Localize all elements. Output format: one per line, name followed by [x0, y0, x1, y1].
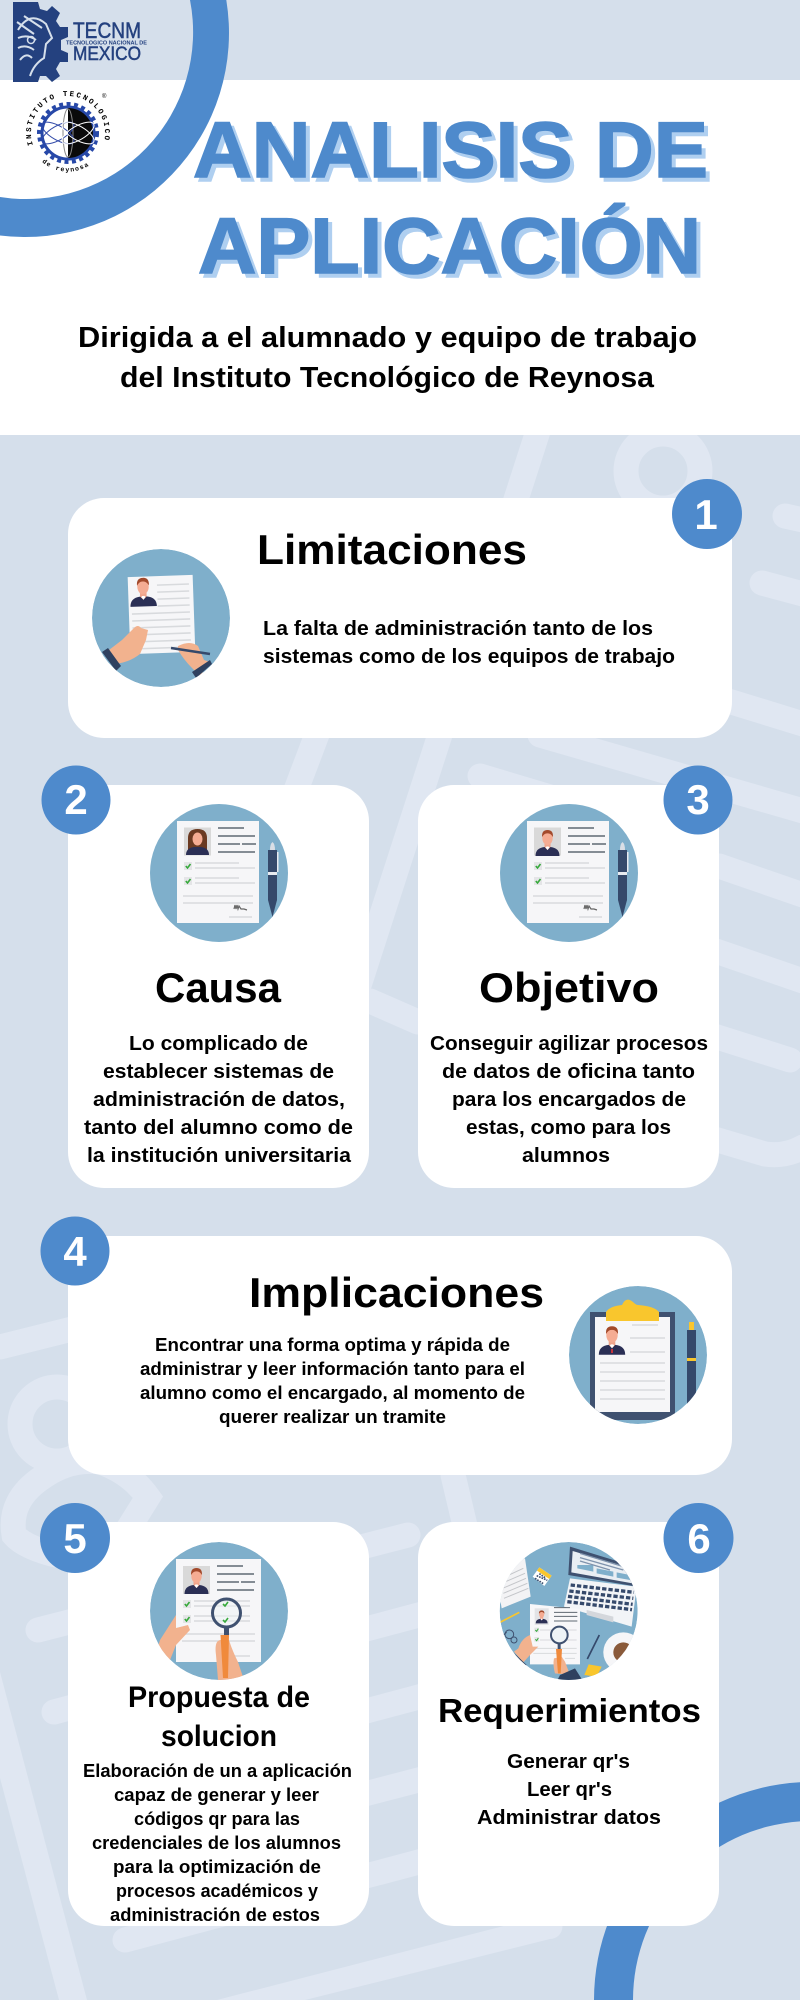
number badge 4: 4: [63, 1228, 87, 1275]
text block: [83, 1760, 352, 1925]
panel: Limitaciones: [68, 479, 742, 738]
text block: [84, 1032, 353, 1167]
card background: [68, 498, 732, 738]
title: ANALISIS DE: [197, 109, 712, 198]
heading: Requerimientos: [438, 1692, 701, 1729]
number badge 3: 3: [686, 776, 710, 823]
text block: establecer sistemas de: [103, 1060, 334, 1083]
text block: para la optimización de: [113, 1856, 321, 1877]
text block: para los encargados de: [452, 1088, 686, 1111]
text block: La falta de administración tanto de los: [263, 617, 653, 640]
title: APLICACIÓN: [202, 205, 705, 294]
text block: credenciales de los alumnos: [92, 1832, 341, 1853]
heading: [128, 1681, 310, 1753]
number badge 5: 5: [63, 1515, 87, 1562]
text block: de datos de oficina tanto: [442, 1060, 695, 1083]
text block: Elaboración de un a aplicación: [83, 1760, 352, 1781]
card background: [68, 1236, 732, 1475]
logo: Instituto Tecnologico de Reynosa: ®: [102, 93, 107, 100]
text block: administración de estos: [110, 1904, 320, 1925]
text block: sistemas como de los equipos de trabajo: [263, 645, 675, 668]
number badge 4: [40, 1216, 110, 1286]
subtitle: [78, 322, 697, 394]
card background: [68, 1522, 369, 1926]
heading: solucion: [161, 1720, 277, 1753]
number badge 1: 1: [694, 491, 718, 538]
title: APLICACIÓN: [198, 201, 701, 290]
text block: Encontrar una forma optima y rápida de: [155, 1334, 510, 1355]
panel: Objetivo: [418, 766, 732, 1188]
heading: Implicaciones: [249, 1269, 544, 1316]
panel: Implicaciones: [40, 1216, 732, 1475]
text block: Generar qr's: [507, 1750, 630, 1773]
text block: querer realizar un tramite: [219, 1406, 446, 1427]
text block: [477, 1750, 661, 1829]
logo: Instituto Tecnologico de Reynosa: de reynosa: [42, 160, 89, 173]
subtitle: del Instituto Tecnológico de Reynosa: [120, 362, 655, 394]
heading: Causa: [155, 964, 282, 1011]
logo: TECNM: TECNM: [73, 18, 141, 43]
panel: Requerimientos: [418, 1503, 734, 1926]
text block: alumno como el encargado, al momento de: [140, 1382, 525, 1403]
text block: Conseguir agilizar procesos: [430, 1032, 708, 1055]
number badge 2: 2: [64, 776, 88, 823]
white header band: [0, 80, 800, 435]
number badge 3: [664, 766, 732, 834]
number badge 6: 6: [687, 1515, 711, 1562]
title: ANALISIS DE: [193, 105, 708, 194]
background pattern: [0, 425, 800, 2000]
logo: TECNM: MEXICO: [73, 44, 141, 65]
text block: procesos académicos y: [116, 1880, 319, 1901]
text block: estas, como para los: [466, 1116, 671, 1139]
number badge 1: [672, 479, 742, 549]
text block: [430, 1032, 708, 1167]
logo: Instituto Tecnologico de Reynosa: [26, 91, 110, 173]
text block: Lo complicado de: [129, 1032, 308, 1055]
text block: códigos qr para las: [134, 1808, 300, 1829]
subtitle: Dirigida a el alumnado y equipo de trabajo: [78, 322, 697, 354]
heading: Objetivo: [479, 964, 659, 1011]
icon: resume with man: [500, 804, 638, 942]
title: [193, 105, 712, 294]
number badge 6: [664, 1503, 734, 1573]
number badge 2: [42, 766, 110, 834]
blue arc bottom right: [594, 1782, 800, 2000]
logo: TECNM: [13, 2, 147, 82]
card background: [418, 785, 719, 1188]
card background: [418, 1522, 719, 1926]
heading: Propuesta de: [128, 1681, 310, 1714]
icon: magnifier over resume: [150, 1542, 288, 1680]
card background: [68, 785, 369, 1188]
heading: Limitaciones: [257, 526, 527, 573]
panel: Propuesta de solucion: [40, 1503, 369, 1926]
text block: alumnos: [522, 1144, 610, 1167]
icon: clipboard with resume: [569, 1286, 707, 1424]
icon: hands signing resume: [92, 549, 230, 687]
text block: capaz de generar y leer: [114, 1784, 319, 1805]
number badge 5: [40, 1503, 110, 1573]
icon: resume with woman: [150, 804, 288, 942]
text block: tanto del alumno como de: [84, 1116, 353, 1139]
text block: la institución universitaria: [87, 1144, 352, 1167]
text block: administración de datos,: [93, 1088, 345, 1111]
icon: desk with laptop and resume: [495, 1542, 643, 1682]
panel: Causa: [42, 766, 369, 1188]
text block: [263, 617, 675, 668]
blue arc top left: [0, 0, 229, 237]
text block: Leer qr's: [527, 1778, 612, 1801]
logo: Instituto Tecnologico de Reynosa: INSTITUTO TECNOLOGICO: [26, 91, 110, 146]
logo: TECNM: TECNOLOGICO NACIONAL DE: [66, 40, 147, 46]
text block: administrar y leer información tanto para el: [140, 1358, 525, 1379]
text block: [140, 1334, 525, 1427]
text block: Administrar datos: [477, 1806, 661, 1829]
